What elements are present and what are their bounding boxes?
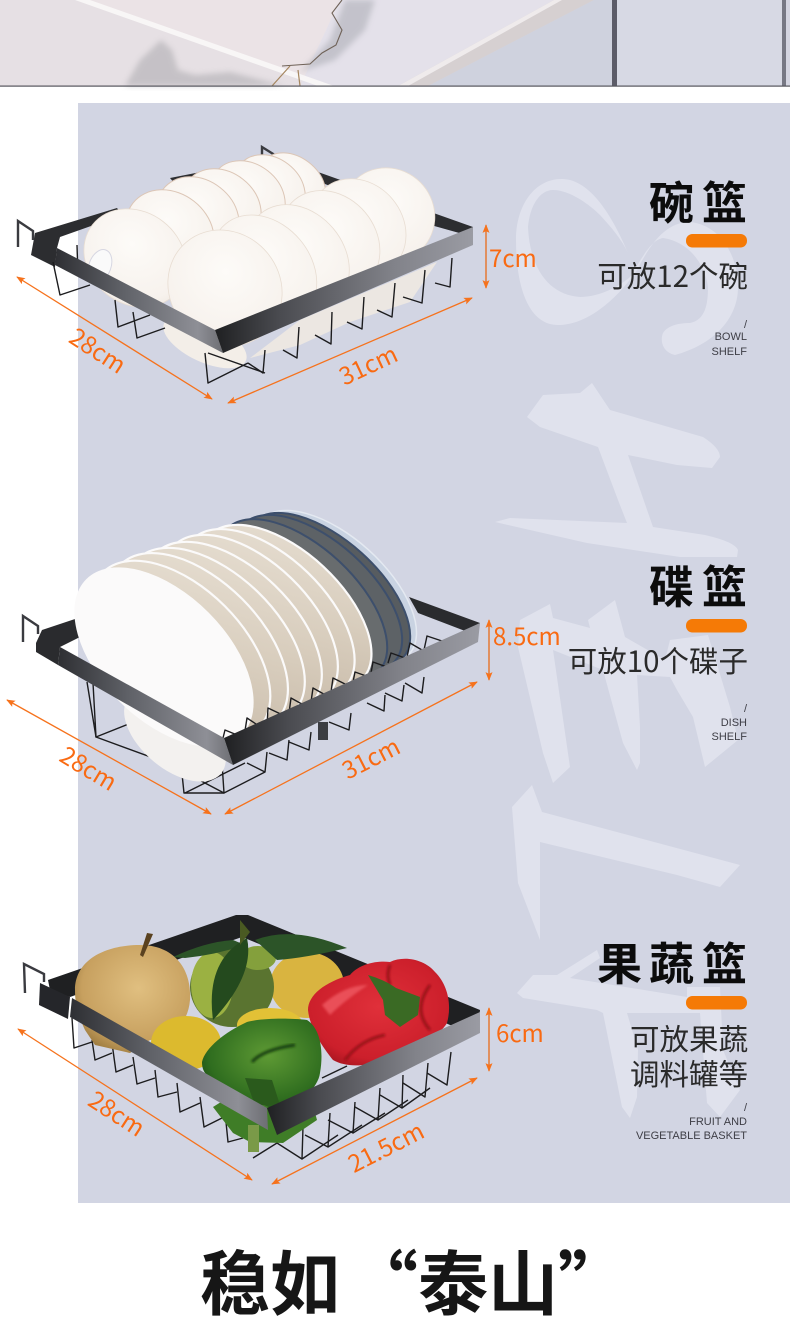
stacked plates <box>42 483 443 779</box>
lower edge of dish <box>107 670 243 800</box>
top photo: marble counter <box>0 0 790 87</box>
rear fruit frame <box>24 915 480 1030</box>
rear frame bands <box>18 147 473 267</box>
pear <box>75 933 190 1053</box>
capacity text: 调料罐等 <box>630 1052 748 1094</box>
arrows and dimensions: bowl: 7cm <box>489 239 537 274</box>
english label <box>712 319 748 358</box>
english label: VEGETABLE BASKET <box>636 1130 747 1142</box>
heading: dish: 碟篮 <box>649 562 747 613</box>
dish front rim <box>58 647 233 765</box>
orange pill <box>686 234 747 248</box>
capacity text: 可放12个碗 <box>597 254 748 296</box>
red pepper <box>308 959 449 1065</box>
section: fruit and vegetable basket product <box>24 915 480 1159</box>
lower right wire ribs <box>224 677 424 793</box>
section: bowl shelf product <box>18 140 473 383</box>
english label: SHELF <box>712 731 747 743</box>
heading: fruit: 果蔬篮 <box>597 939 747 990</box>
background calligraphy strokes <box>495 179 740 1118</box>
arrows and dimensions: dish: 8.5cm <box>493 617 561 652</box>
capacity text: 可放10个碟子 <box>568 639 748 681</box>
english label: / <box>744 703 748 715</box>
arrows and dimensions: bowl: 28cm <box>64 318 134 381</box>
front rim <box>55 248 223 353</box>
lower bowl edges under frame <box>156 262 437 379</box>
leaves <box>173 920 347 1020</box>
green pepper lower part and stem <box>213 1090 317 1152</box>
arrows and dimensions: bowl <box>17 225 537 403</box>
background panel <box>78 103 790 1203</box>
english label: SHELF <box>712 346 747 358</box>
dish rear wires <box>87 682 245 793</box>
arrows and dimensions: dish <box>7 617 561 814</box>
text block: bowl shelf <box>597 178 748 358</box>
lemon back <box>270 952 344 1018</box>
english label: / <box>744 319 748 331</box>
fruit wire lattice <box>72 1018 451 1159</box>
capacity text: 可放果蔬 <box>630 1017 748 1059</box>
orange pill <box>686 996 747 1010</box>
arrows and dimensions: fruit: 28cm <box>83 1081 153 1144</box>
wire basket under bowls <box>115 258 452 383</box>
arrows and dimensions: dish: 28cm <box>54 736 125 798</box>
english label: FRUIT AND <box>689 1116 747 1128</box>
front bowls <box>144 149 454 369</box>
text block: dish shelf <box>568 562 748 743</box>
heading: bowl: 碗篮 <box>649 178 747 229</box>
arrows and dimensions: bowl: 31cm <box>332 335 403 392</box>
rear dish frame <box>23 597 480 665</box>
english label: DISH <box>721 717 747 729</box>
bowl wires behind <box>53 245 90 295</box>
text block: fruit basket <box>597 939 748 1142</box>
lemon front <box>151 1016 221 1070</box>
capacity text <box>630 1017 748 1094</box>
english label <box>712 703 748 743</box>
orange pill <box>686 619 747 632</box>
english label: / <box>744 1102 748 1114</box>
arrows and dimensions: fruit <box>18 1008 544 1184</box>
dish slot wires <box>223 636 445 738</box>
arrows and dimensions: dish: 31cm <box>335 727 405 786</box>
green citrus <box>190 946 276 1027</box>
green pepper <box>202 1019 321 1110</box>
arrows and dimensions: fruit: 21.5cm <box>341 1112 429 1180</box>
english label <box>636 1102 748 1142</box>
english label: BOWL <box>715 331 747 343</box>
fruit front rim <box>70 998 268 1130</box>
section: dish shelf product <box>23 483 480 800</box>
arrows and dimensions: fruit: 6cm <box>496 1014 544 1049</box>
lemon middle <box>237 1008 303 1042</box>
back bowls <box>64 140 337 327</box>
